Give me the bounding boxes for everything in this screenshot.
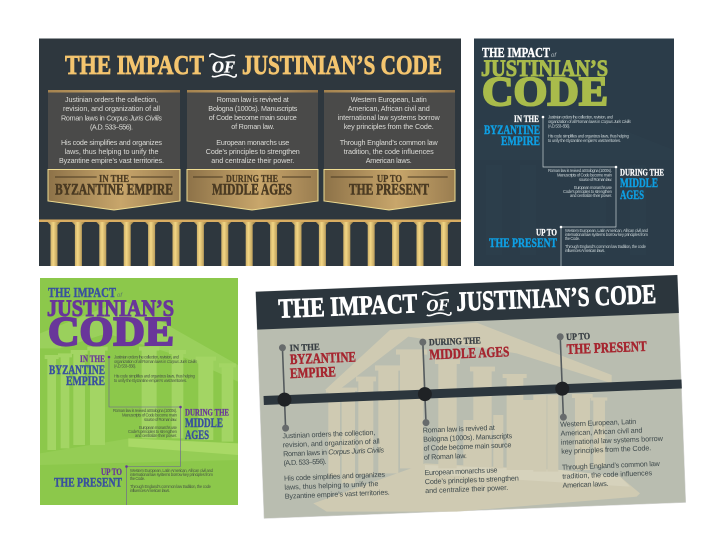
- text: Byzantine: Byzantine empire’s vast territories.: [285, 488, 390, 501]
- title banner: JUSTINIAN’S CODE: [456, 278, 657, 317]
- text: middle ages: and centralize their power.: [135, 433, 177, 438]
- card 2: of Code become main source: [209, 113, 297, 122]
- heading: in the Byzantine empire: BYZANTINE: [484, 123, 540, 137]
- text: Byzantine: [282, 427, 390, 501]
- card 2: Roman law is revived at: [217, 95, 289, 104]
- card 1: Roman laws in Corpus Juris Civilis: [61, 113, 162, 122]
- text: present: influences American laws.: [130, 488, 170, 493]
- card 3: international law systems borrow: [338, 113, 440, 122]
- temple illustration: [313, 323, 640, 512]
- text: middle ages: Roman law is revived at Bologna (1000s).: [113, 408, 177, 413]
- heading: in the Byzantine empire: BYZANTINE: [49, 363, 105, 377]
- text: middle ages: source of Roman law.: [144, 417, 177, 422]
- title banner: OF: [426, 295, 450, 315]
- card 3: Western European, Latin: [351, 95, 427, 104]
- card 2: and centralize their power.: [211, 156, 294, 165]
- title: JUSTINIAN’S CODE: [242, 49, 442, 80]
- text: middle ages: European monarchs use: [139, 425, 178, 430]
- title: JUSTINIAN’S: [47, 296, 174, 321]
- text: present: international law systems borrow key principles from: [565, 232, 648, 237]
- text: Byzantine: Roman laws in Corpus Juris Civilis: [283, 445, 385, 458]
- timeline bar: [264, 379, 682, 405]
- banner: during the middle ages: MIDDLE AGES: [212, 182, 292, 199]
- text: present: [560, 416, 665, 490]
- marker 1: [275, 344, 293, 432]
- text: present: [130, 468, 214, 493]
- text: present: influences American laws.: [565, 248, 605, 253]
- text: present: Through England’s common law tradition, the code: [130, 484, 212, 489]
- card 2: European monarchs use: [216, 138, 289, 147]
- banner: up to the present: UP TO: [377, 173, 402, 185]
- colonnade: [39, 220, 461, 266]
- heading: in the Byzantine empire: BYZANTINE: [290, 350, 356, 368]
- card 1: [48, 90, 180, 210]
- text: Byzantine: (A.D. 533–556).: [283, 457, 327, 467]
- card 2: [187, 90, 318, 210]
- text: middle ages: Code’s principles to strengthen: [563, 189, 613, 194]
- text: Byzantine: (A.D. 533–556).: [114, 364, 136, 368]
- text: Byzantine: His code simplifies and organizes: [284, 470, 386, 483]
- text: middle ages: Roman law is revived at: [423, 423, 495, 435]
- heading: up to the present: THE PRESENT: [54, 476, 123, 490]
- text: present: key principles from the Code.: [561, 443, 651, 456]
- text: middle ages: Bologna (1000s). Manuscripts: [423, 431, 513, 444]
- heading: during the middle ages: DURING THE: [429, 336, 481, 348]
- text: middle ages: source of Roman law.: [579, 177, 612, 182]
- card 1: revision, and organization of all: [63, 104, 160, 113]
- text: present: Western European, Latin American, African civil and: [130, 468, 214, 473]
- panel: dark gold version: [39, 38, 461, 266]
- card 3: American laws.: [366, 156, 412, 165]
- title banner: [256, 275, 679, 330]
- heading: in the Byzantine empire: [49, 355, 105, 388]
- banner: in the Byzantine empire: IN THE: [99, 173, 129, 185]
- title: JUSTINIAN’S: [481, 56, 608, 81]
- heading: during the middle ages: MIDDLE: [620, 176, 658, 190]
- text: present: [565, 228, 649, 253]
- heading: in the Byzantine empire: EMPIRE: [66, 374, 105, 388]
- text: present: tradition, the code influences: [562, 468, 653, 481]
- heading: in the Byzantine empire: IN THE: [80, 355, 105, 365]
- timeline connector: [108, 356, 182, 505]
- card 1: laws, thus helping to unify the: [64, 147, 158, 156]
- text: Byzantine: revision, and organization of all: [283, 437, 380, 449]
- heading: in the Byzantine empire: EMPIRE: [501, 134, 540, 148]
- card 3: American, African civil and: [348, 104, 430, 113]
- text: middle ages: of Roman law.: [424, 451, 467, 462]
- banner: up to the present: THE PRESENT: [349, 182, 429, 199]
- text: middle ages: [423, 422, 519, 495]
- heading: in the Byzantine empire: [289, 342, 357, 382]
- text: Byzantine: [548, 114, 632, 143]
- heading: up to the present: UP TO: [101, 468, 122, 478]
- text: middle ages: Roman law is revived at Bologna (1000s).: [548, 168, 612, 173]
- title: CODE: [48, 308, 174, 354]
- text: Byzantine: organization of all Roman laws in Corpus Juris Civilis: [114, 359, 198, 364]
- panel: green vertical version: [40, 278, 238, 505]
- text: Byzantine: to unify the Byzantine empire’s vast territories.: [114, 378, 187, 383]
- text: middle ages: Code’s principles to strengthen: [425, 473, 519, 486]
- card 3: key principles from the Code.: [344, 122, 434, 131]
- heading: during the middle ages: [620, 169, 664, 202]
- text: middle ages: and centralize their power.: [570, 193, 612, 198]
- text: present: the Code.: [565, 236, 580, 241]
- banner: in the Byzantine empire: BYZANTINE EMPIRE: [55, 182, 173, 199]
- card 3: Through England’s common law: [340, 138, 438, 147]
- card 2: Code’s principles to strengthen: [206, 147, 300, 156]
- heading: in the Byzantine empire: IN THE: [514, 115, 539, 125]
- marker 2: [416, 338, 433, 426]
- title: THE IMPACT: [65, 49, 204, 80]
- card 1: Justinian orders the collection,: [65, 95, 158, 104]
- card 1: Byzantine empire’s vast territories.: [59, 156, 164, 165]
- text: present: the Code.: [130, 476, 145, 481]
- title: CODE: [482, 68, 608, 114]
- text: Byzantine: Justinian orders the collection,: [282, 428, 376, 440]
- banner: during the middle ages: DURING THE: [226, 173, 278, 185]
- text: present: Through England’s common law: [562, 459, 661, 472]
- card 1: (A.D. 533–556).: [90, 122, 133, 131]
- text: Byzantine: organization of all Roman laws in Corpus Juris Civilis: [548, 119, 632, 124]
- heading: in the Byzantine empire: EMPIRE: [290, 364, 336, 382]
- title: OF: [212, 58, 235, 76]
- marker 3: [553, 333, 571, 421]
- heading: during the middle ages: AGES: [620, 188, 644, 202]
- card 3: [324, 90, 455, 210]
- text: Byzantine: laws, thus helping to unify the: [284, 479, 379, 492]
- text: present: international law systems borrow key principles from: [130, 472, 213, 477]
- text: Byzantine: Justinian orders the collection, revision, and: [548, 114, 614, 120]
- text: present: American laws.: [562, 479, 609, 490]
- text: middle ages: Code’s principles to strengthen: [128, 429, 178, 434]
- text: Byzantine: to unify the Byzantine empire’s vast territories.: [548, 138, 621, 143]
- heading: in the Byzantine empire: [484, 115, 540, 148]
- text: middle ages: European monarchs use: [574, 185, 613, 190]
- text: present: American, African civil and: [560, 426, 643, 438]
- text: middle ages: [548, 168, 613, 198]
- banner: in the Byzantine empire: [48, 170, 180, 210]
- heading: up to the present: [489, 229, 558, 250]
- text: Byzantine: His code simplifies and organizes laws, thus helping: [114, 374, 196, 378]
- title: THE IMPACT: [48, 285, 116, 300]
- text: present: Through England’s common law tradition, the code: [565, 244, 647, 249]
- title banner: THE IMPACT: [278, 287, 418, 324]
- tilted content: [256, 275, 686, 502]
- card 3: tradition, the code influences: [344, 147, 434, 156]
- heading: during the middle ages: MIDDLE: [185, 416, 223, 430]
- heading: during the middle ages: [429, 335, 510, 363]
- text: middle ages: Manuscripts of Code become main: [122, 412, 178, 418]
- heading: up to the present: [566, 330, 647, 358]
- heading: up to the present: THE PRESENT: [566, 339, 647, 358]
- text: present: Western European, Latin: [560, 417, 636, 429]
- heading: during the middle ages: MIDDLE AGES: [429, 344, 510, 363]
- text: present: international law systems borrow: [561, 434, 664, 447]
- text: Byzantine: [114, 354, 198, 383]
- title: of: [551, 53, 557, 59]
- card 2: Bologna (1000s). Manuscripts: [208, 104, 298, 113]
- text: middle ages: of Code become main source: [423, 440, 512, 453]
- card 2: of Roman law.: [231, 122, 274, 131]
- text: present: Western European, Latin American, African civil and: [565, 228, 649, 233]
- temple illustration: [40, 300, 238, 465]
- text: Byzantine: (A.D. 533–556).: [548, 124, 570, 128]
- heading: up to the present: [54, 468, 123, 490]
- title: [65, 49, 442, 80]
- text: middle ages: [113, 408, 178, 438]
- text: middle ages: Manuscripts of Code become main: [557, 172, 613, 178]
- text: middle ages: European monarchs use: [424, 465, 498, 477]
- card 1: His code simplifies and organizes: [61, 138, 162, 147]
- title: THE IMPACT: [482, 45, 550, 60]
- banner: up to the present: [324, 170, 455, 210]
- panel: navy vertical version: [474, 38, 674, 266]
- heading: during the middle ages: AGES: [185, 428, 209, 442]
- heading: during the middle ages: [185, 409, 229, 442]
- heading: during the middle ages: DURING THE: [185, 409, 229, 419]
- banner: during the middle ages: [187, 170, 318, 210]
- timeline connector: [542, 116, 617, 266]
- title: [481, 45, 608, 114]
- heading: during the middle ages: DURING THE: [620, 169, 664, 179]
- panel: tilted grey timeline version: [256, 275, 686, 518]
- heading: up to the present: UP TO: [536, 229, 557, 239]
- title: of: [117, 293, 123, 299]
- heading: up to the present: UP TO: [566, 332, 590, 343]
- heading: in the Byzantine empire: IN THE: [289, 343, 320, 354]
- text: Byzantine: His code simplifies and organizes laws, thus helping: [548, 134, 630, 138]
- heading: up to the present: THE PRESENT: [489, 236, 558, 250]
- title: [47, 285, 174, 354]
- text: Byzantine: Justinian orders the collection, revision, and: [114, 354, 180, 360]
- text: middle ages: and centralize their power.: [425, 483, 508, 495]
